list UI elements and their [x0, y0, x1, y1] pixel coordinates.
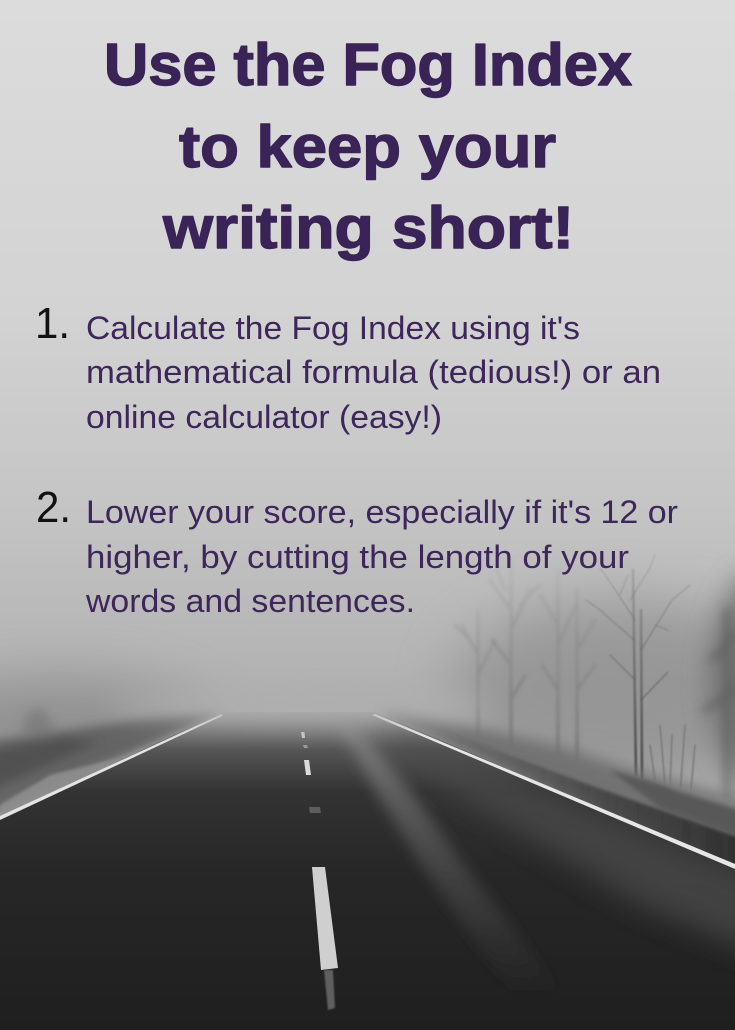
step 2 text	[85, 494, 678, 619]
step 2 text: Lower your score, especially if it's 12 or	[86, 494, 678, 530]
step 1 number: 1.	[35, 299, 70, 348]
foggy trees	[455, 555, 735, 800]
step 1 text: online calculator (easy!)	[86, 399, 442, 435]
horizon fog overlay	[110, 689, 490, 721]
title	[104, 32, 632, 261]
title: Use the Fog Index	[104, 32, 632, 98]
step 2 text: words and sentences.	[85, 583, 415, 619]
step 1 text	[86, 310, 661, 435]
step 2	[36, 483, 678, 619]
title: writing short!	[162, 195, 574, 261]
step 1 text: mathematical formula (tedious!) or an	[86, 354, 661, 390]
title: to keep your	[179, 114, 556, 180]
step 1	[35, 299, 661, 435]
step 1 text: Calculate the Fog Index using it's	[86, 310, 580, 346]
right lane lighter area	[382, 724, 735, 951]
right roadside bank	[375, 712, 735, 880]
centre line dashes	[301, 732, 338, 1010]
wet tyre track	[345, 732, 519, 955]
road surface	[0, 712, 735, 1030]
left roadside bank	[0, 708, 222, 830]
step 2 text: higher, by cutting the length of your	[86, 539, 629, 575]
road edge line: left	[0, 714, 222, 820]
road edge line: right	[372, 714, 735, 869]
step 2 number: 2.	[36, 483, 71, 532]
